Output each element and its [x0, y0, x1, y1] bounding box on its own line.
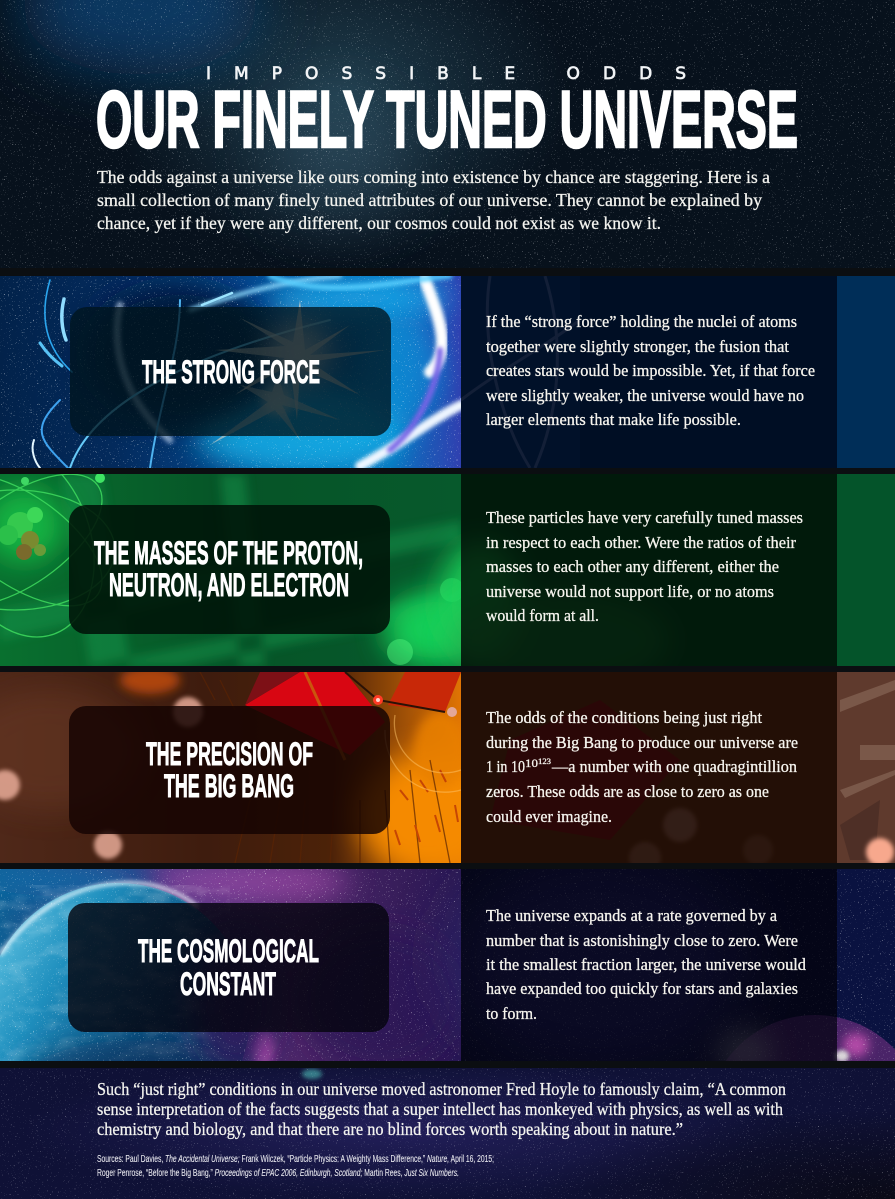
- intro paragraph: chance, yet if they were any different, our cosmos could not exist as we know it.: [97, 213, 661, 233]
- green atom artwork: [0, 474, 461, 666]
- eyebrow: IMPOSSIBLE ODDS: [206, 64, 686, 84]
- description: cosmological constant: have expanded too quickly for stars and galaxies: [486, 979, 798, 998]
- description: masses: universe would not support life, or no atoms: [486, 582, 774, 601]
- closing quote: sense interpretation of the facts suggests that a super intellect has monkeyed with physics, as well as with: [97, 1099, 783, 1119]
- heading: precision: THE PRECISION OF: [146, 736, 313, 772]
- closing quote: chemistry and biology, and that there are no blind forces worth speaking about in nature.”: [97, 1119, 683, 1139]
- description: precision: The odds of the conditions being just right: [486, 708, 762, 727]
- heading: precision: [146, 742, 313, 798]
- strong force energy artwork: [0, 276, 461, 475]
- heading: precision: THE BIG BANG: [164, 768, 294, 804]
- description: cosmological constant: [486, 906, 807, 1023]
- intro paragraph: [97, 167, 770, 233]
- sources: Sources: Paul Davies, The Accidental Universe; Frank Wilczek, “Particle Physics: A Weighty Mass Difference,” Nature, April 16, 2015;: [97, 1153, 494, 1165]
- heading: cosmological constant: THE COSMOLOGICAL: [138, 933, 319, 969]
- description: cosmological constant: The universe expands at a rate governed by a: [486, 906, 778, 925]
- description: precision: 10: [525, 756, 538, 770]
- description: cosmological constant: to form.: [486, 1004, 537, 1023]
- header panel: [0, 0, 895, 268]
- description: precision: 123: [538, 757, 551, 766]
- heading: masses: THE MASSES OF THE PROTON,: [94, 535, 363, 571]
- description: precision: 1 in 10: [486, 757, 525, 776]
- description: cosmological constant: number that is astonishingly close to zero. Were: [486, 931, 798, 950]
- description: precision: during the Big Bang to produce our universe are: [486, 733, 798, 752]
- description: strong force: creates stars would be impossible. Yet, if that force: [486, 361, 815, 380]
- description panel scrim: [461, 672, 837, 863]
- heading card: [69, 706, 390, 834]
- description: masses: These particles have very carefully tuned masses: [486, 508, 803, 527]
- description: precision: [486, 708, 798, 826]
- closing quote: [97, 1079, 786, 1139]
- bokeh lights: [0, 697, 203, 859]
- star burst: [210, 300, 385, 445]
- heading: masses: [94, 540, 362, 602]
- description panel scrim: [461, 474, 837, 666]
- description: strong force: If the “strong force” holding the nuclei of atoms: [486, 312, 797, 331]
- description: masses: in respect to each other. Were the ratios of their: [486, 533, 796, 552]
- intro paragraph: small collection of many finely tuned attributes of our universe. They cannot be explained by: [97, 190, 762, 210]
- artwork behind description: [438, 474, 895, 690]
- description: cosmological constant: it the smallest fraction larger, the universe would: [486, 955, 807, 974]
- footer panel: [0, 1061, 895, 1199]
- sources: [97, 1153, 494, 1179]
- heading card: [68, 903, 389, 1032]
- description: masses: would form at all.: [486, 606, 599, 625]
- artwork behind description: [461, 672, 895, 874]
- panel: the cosmological constant: [0, 869, 895, 1061]
- panel: the strong force: [0, 276, 895, 475]
- planet and nebula artwork: [0, 869, 461, 1061]
- mirrored artwork behind description: [461, 276, 895, 468]
- intro paragraph: The odds against a universe like ours coming into existence by chance are staggering. Here is a: [97, 167, 770, 187]
- description: strong force: larger elements that make life possible.: [486, 410, 741, 429]
- heading: masses: NEUTRON, AND ELECTRON: [109, 567, 349, 603]
- nucleus: [0, 507, 46, 560]
- description: precision: could ever imagine.: [486, 807, 612, 826]
- description: strong force: [486, 312, 815, 429]
- panel: the masses of the proton, neutron, and electron: [0, 474, 895, 666]
- heading card: [69, 505, 390, 634]
- artwork behind description: [418, 869, 895, 1061]
- sources: Roger Penrose, “Before the Big Bang,” Proceedings of EPAC 2006, Edinburgh, Scotland; Martin Rees, Just Six Numbers.: [97, 1167, 459, 1179]
- description: masses: masses to each other any different, either the: [486, 557, 779, 576]
- description: strong force: were slightly weaker, the universe would have no: [486, 386, 804, 405]
- description: precision: —a number with one quadragintillion: [551, 757, 798, 776]
- description panel scrim: [461, 276, 837, 468]
- heading: cosmological constant: [138, 938, 319, 996]
- description: precision: zeros. These odds are as close to zero as one: [486, 782, 769, 801]
- heading: cosmological constant: CONSTANT: [180, 966, 276, 1002]
- description panel scrim: [461, 869, 837, 1061]
- closing quote: Such “just right” conditions in our universe moved astronomer Fred Hoyle to famously claim, “A common: [97, 1079, 786, 1099]
- description: strong force: together were slightly stronger, the fusion that: [486, 337, 789, 356]
- description: masses: [486, 508, 803, 625]
- reactor artwork: [0, 672, 461, 863]
- heading card: [70, 307, 391, 436]
- panel: the precision of the big bang: [0, 666, 895, 877]
- heading: the strong force: THE STRONG FORCE: [142, 354, 320, 390]
